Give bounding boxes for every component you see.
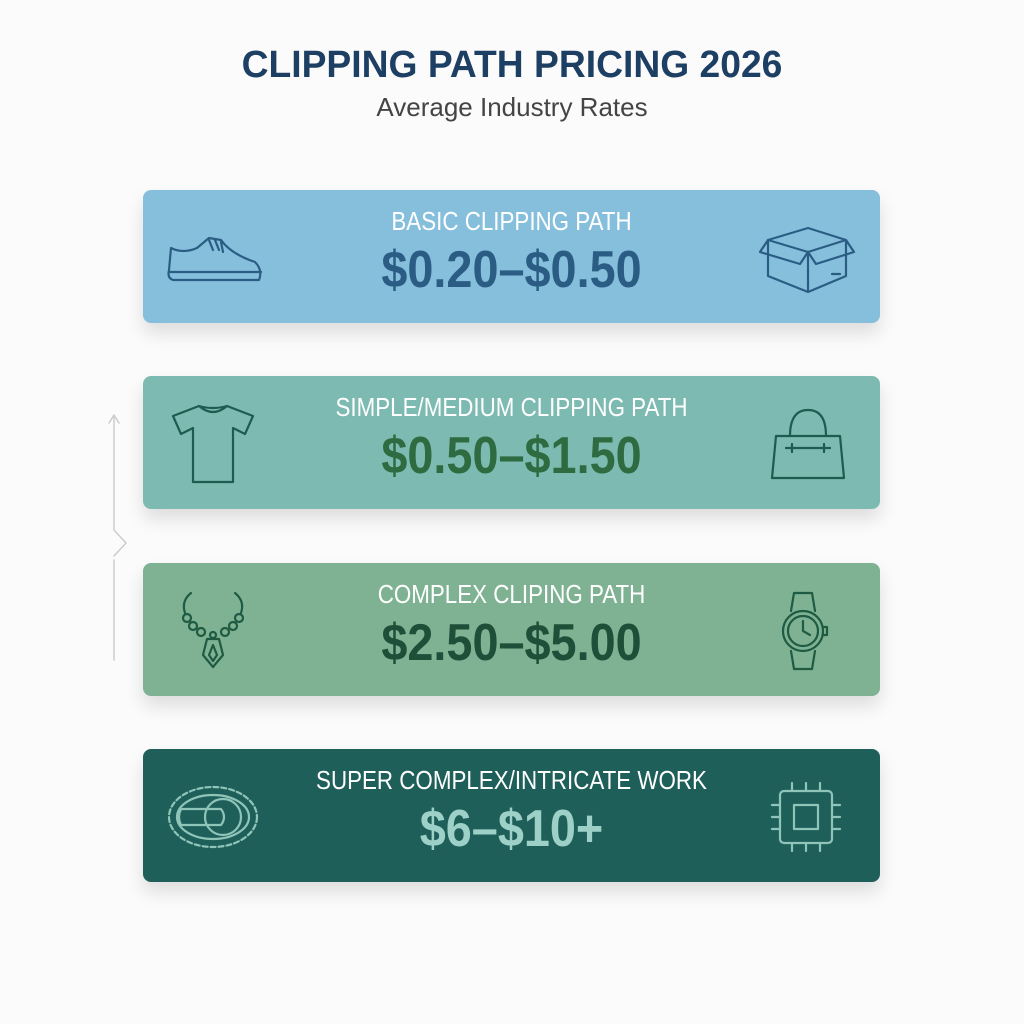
panel: basic [143,190,880,323]
panel: simple/medium [143,376,880,509]
icon: chip [771,782,841,852]
label: BASIC CLIPPING PATH [391,206,632,236]
side arrow [108,414,127,661]
icon: shoe [167,236,262,282]
price: $0.20–$0.50 [381,241,642,299]
price: $2.50–$5.00 [381,614,642,672]
panel: super complex [143,749,880,882]
icon: t-shirt [172,404,254,484]
icon: watch [782,592,828,670]
label: SUPER COMPLEX/INTRICATE WORK [316,765,707,795]
icon: box [758,226,856,294]
price: $0.50–$1.50 [381,427,642,485]
icon: necklace [182,592,244,668]
title: CLIPPING PATH PRICING 2026 [242,44,782,86]
panel: complex [143,563,880,696]
subtitle: Average Industry Rates [376,92,648,122]
price: $6–$10+ [420,800,603,858]
icon: bike chain gear [168,786,258,848]
icon: handbag [770,408,846,480]
label: COMPLEX CLIPING PATH [378,579,645,609]
label: SIMPLE/MEDIUM CLIPPING PATH [335,392,688,422]
